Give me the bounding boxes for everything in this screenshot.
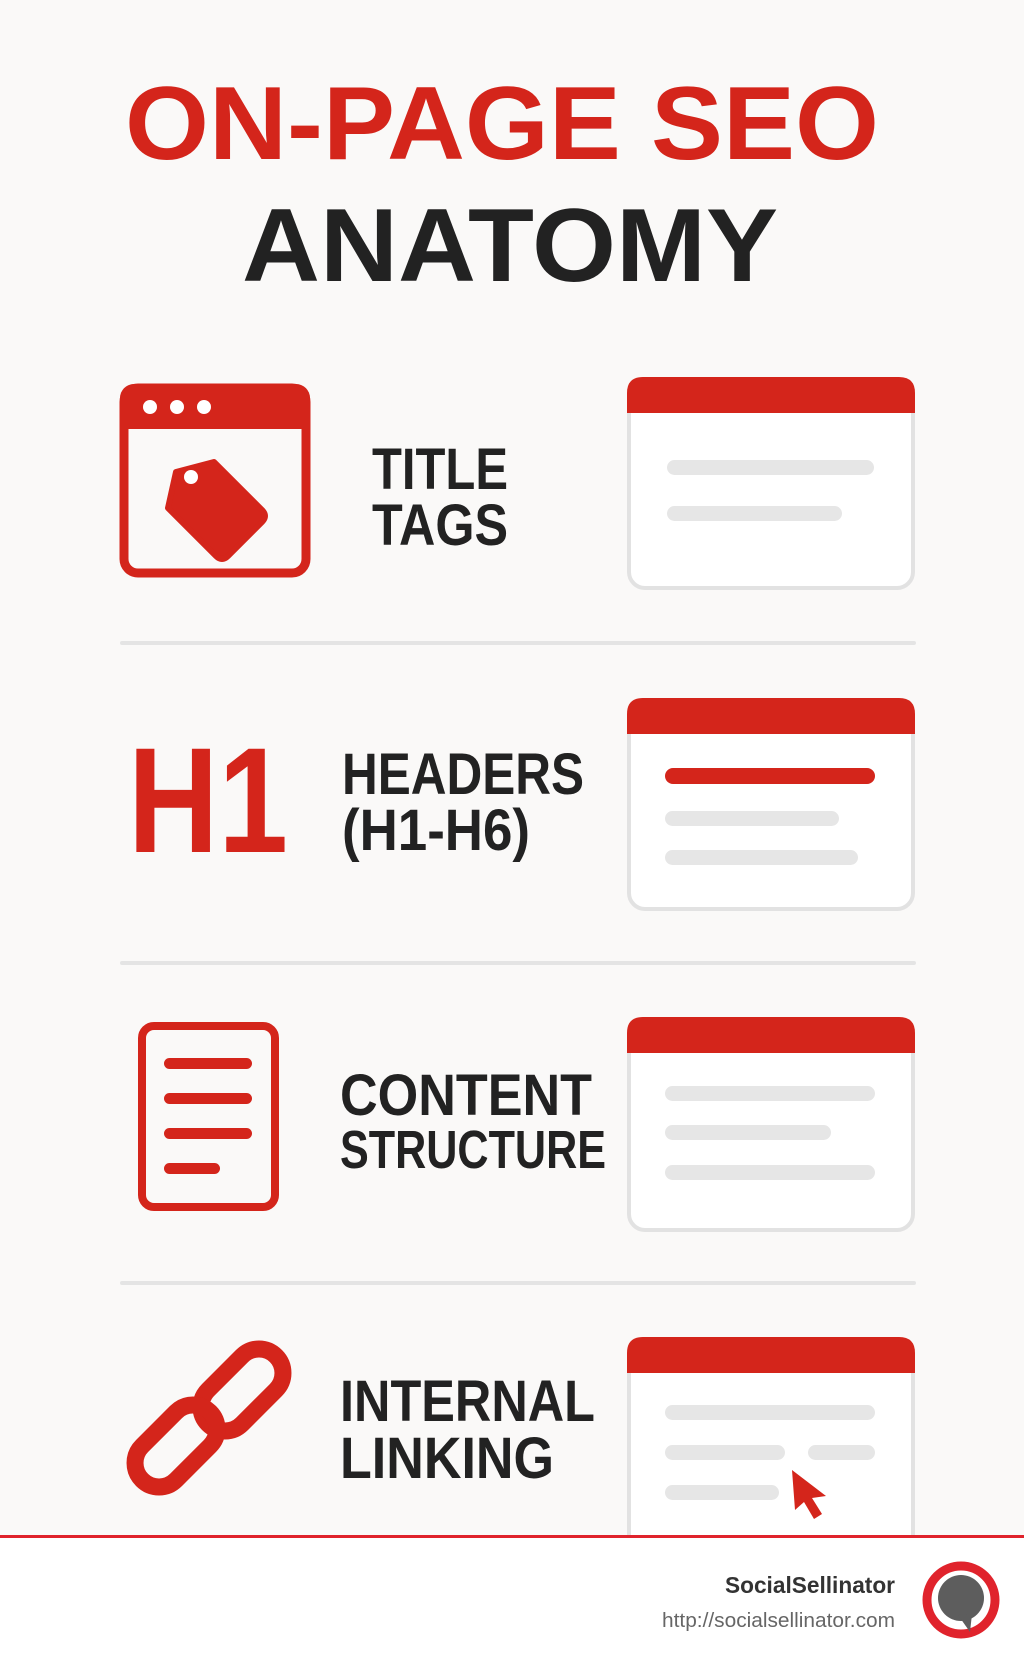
text: content structure: CONTENT	[340, 1063, 592, 1128]
icon: logo	[927, 1566, 995, 1634]
panel: title tags	[120, 377, 915, 588]
panel: headers	[128, 698, 915, 909]
title	[125, 66, 879, 304]
icon: H1: H1	[128, 716, 288, 884]
icon: document	[142, 1026, 275, 1207]
title: ANATOMY	[242, 188, 778, 304]
footer: http://socialsellinator.com	[662, 1610, 895, 1632]
text: headers: HEADERS	[342, 742, 584, 807]
icon: browser tag	[120, 384, 310, 573]
card: headers preview	[627, 698, 915, 909]
panel: internal linking	[125, 1337, 915, 1559]
footer: SocialSellinator	[725, 1572, 895, 1598]
panel: title tags: TAGS	[372, 493, 508, 558]
icon: chain link	[125, 1339, 293, 1497]
icon: cursor	[792, 1470, 826, 1519]
card: content preview	[627, 1017, 915, 1230]
footer	[0, 1535, 1024, 1666]
panel: content structure: STRUCTURE	[340, 1120, 606, 1180]
text: title tags: TITLE	[372, 437, 508, 502]
card: linking preview	[627, 1337, 915, 1559]
title: ON-PAGE SEO	[125, 66, 879, 182]
text: internal linking: INTERNAL	[340, 1369, 595, 1434]
panel: headers: (H1-H6)	[342, 798, 530, 863]
panel: internal linking: LINKING	[340, 1426, 554, 1491]
panel: content structure	[142, 1017, 915, 1230]
card: title preview	[627, 377, 915, 588]
